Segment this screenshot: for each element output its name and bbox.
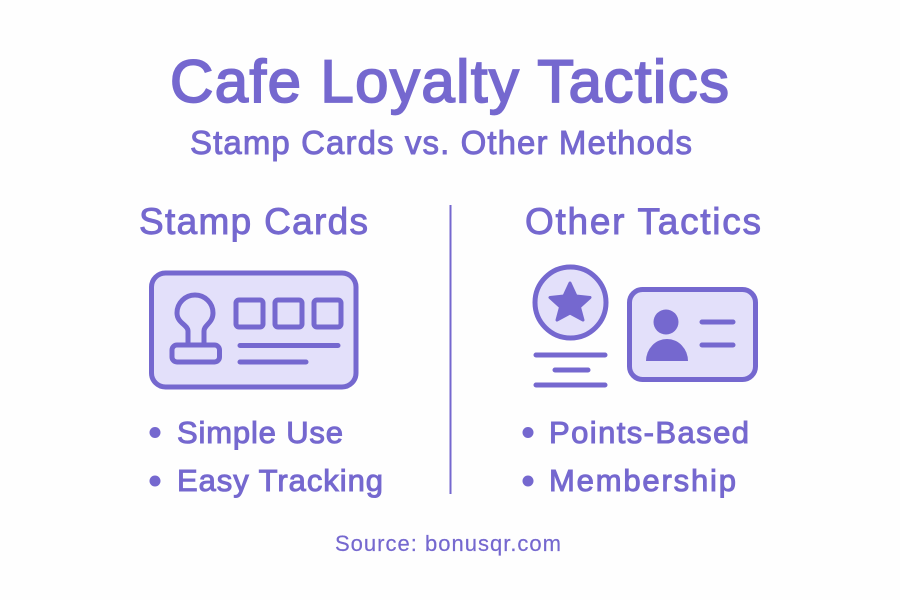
- list: stamp card benefits: [150, 415, 383, 498]
- title: Cafe Loyalty Tactics: [170, 48, 729, 115]
- list: other tactics: Points-Based: [549, 415, 749, 450]
- panel: stamp cards: [139, 201, 383, 498]
- list: other tactics: [522, 415, 749, 498]
- heading: stamp cards: Stamp Cards: [139, 201, 368, 242]
- list: stamp card benefits: Simple Use: [177, 415, 343, 450]
- source: Source: bonusqr.com: [335, 531, 561, 556]
- panel: other tactics: [522, 201, 761, 498]
- icon: membership card: [630, 290, 756, 380]
- icon: stamp card: [152, 273, 356, 387]
- list: stamp card benefits: Easy Tracking: [177, 463, 383, 498]
- heading: other tactics: Other Tactics: [525, 201, 761, 242]
- subtitle: Stamp Cards vs. Other Methods: [190, 124, 692, 161]
- icon: points badge: [535, 267, 606, 385]
- list: other tactics: Membership: [549, 463, 736, 498]
